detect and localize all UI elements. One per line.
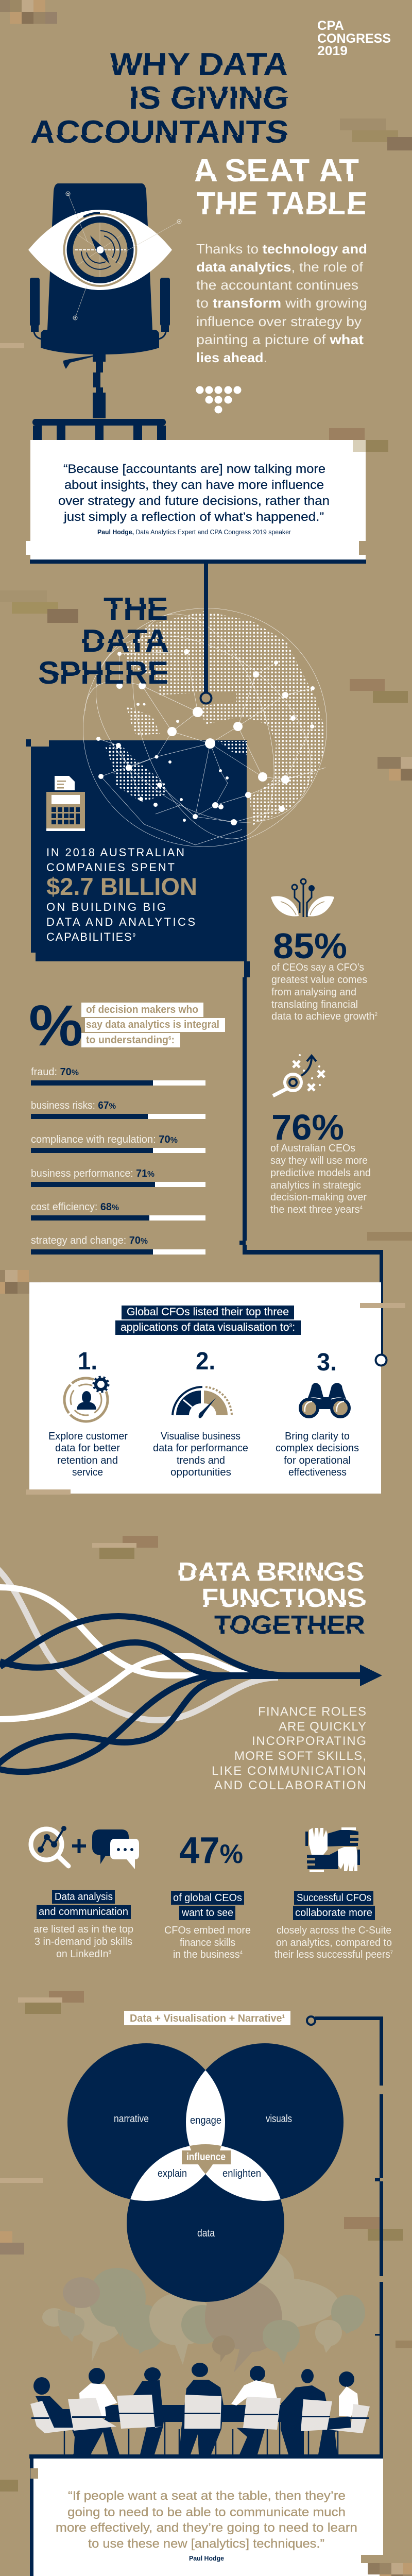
stat: 76% of Australian CEOs: the next three years <box>270 1204 362 1215</box>
callout: decision makers: say data analytics is integral <box>86 1019 219 1030</box>
application 1: data for better <box>55 1443 120 1454</box>
stat: 76% of Australian CEOs: analytics in strategic <box>270 1180 361 1191</box>
title: THE TABLE <box>197 186 368 222</box>
application 3: effectiveness <box>288 1467 347 1478</box>
chart: venn diagram: engage <box>190 2115 221 2126</box>
title: A SEAT AT <box>193 153 359 189</box>
panel: seat at the table quote <box>29 2454 412 2576</box>
application 1: 1. <box>78 1348 97 1375</box>
title: ACCOUNTANTS <box>32 114 289 150</box>
text: finance roles: INCORPORATING <box>252 1734 366 1748</box>
text block: data analysis and communication: Data analysis <box>55 1891 113 1903</box>
quote attribution: Paul Hodge <box>189 2554 224 2562</box>
stat: 76% of Australian CEOs: 76% <box>271 1107 344 1147</box>
application 3: Bring clarity to <box>285 1431 350 1442</box>
text block: data analysis and communication: 3 in-demand job skills <box>35 1936 132 1947</box>
application 1: service <box>72 1467 103 1478</box>
text block: data analysis and communication: are listed as in the top <box>33 1924 133 1935</box>
stat: 76% of Australian CEOs: 4 <box>360 1205 363 1211</box>
section heading: data brings functions together <box>178 1557 365 1639</box>
quote text: about insights, they can have more influence <box>64 478 324 492</box>
stat: 85% of CEOs: translating financial <box>271 999 358 1010</box>
text block: data analysis and communication: 8 <box>109 1950 111 1955</box>
bar chart: data analytics integral to understanding: cost efficiency: 68% <box>31 1201 119 1213</box>
icon: calculator and paper <box>46 776 85 831</box>
intro text: data analytics , the role of <box>196 259 364 275</box>
text block: global CEOs: CFOs embed more <box>164 1925 251 1936</box>
quote text: over strategy and future decisions, rather than <box>58 494 330 508</box>
text block: global CEOs: in the business <box>173 1949 242 1960</box>
panel: Paul Hodge quote <box>26 440 366 564</box>
intro text: to transform with growing <box>196 295 367 311</box>
text: finance roles: LIKE COMMUNICATION <box>212 1764 366 1778</box>
chart: venn diagram: enlighten <box>222 2168 261 2179</box>
stat: 85% of CEOs: of CEOs say a CFO’s <box>271 962 364 973</box>
quote text <box>56 2489 357 2551</box>
quote text: “Because [accountants are] now talking more <box>63 462 325 476</box>
connector line with ring <box>201 564 211 704</box>
intro text: the accountant continues <box>196 277 358 293</box>
logo: CPA Congress 2019: 2019 <box>317 44 348 58</box>
text block: data analysis and communication: on LinkedIn <box>56 1948 109 1960</box>
text block: successful CFOs: collaborate more <box>295 1907 372 1919</box>
text: finance roles: MORE SOFT SKILLS, <box>234 1749 366 1763</box>
application 2 <box>153 1348 248 1478</box>
logo: CPA Congress 2019 <box>317 19 391 58</box>
panel: $2.7 billion navy background <box>31 740 250 977</box>
bar chart: data analytics integral to understanding: business risks: 67% <box>31 1100 116 1111</box>
intro text: painting a picture of what <box>196 332 364 347</box>
stat: $2.7 billion: IN 2018 AUSTRALIAN <box>46 846 184 859</box>
callout: decision makers: of decision makers who <box>86 1004 198 1015</box>
quote text: to use these new [analytics] techniques.” <box>88 2537 324 2551</box>
text block: successful CFOs: 7 <box>390 1950 393 1956</box>
icon: analysis plus communication <box>31 1826 139 1869</box>
icon: converging lines into arrow <box>0 1569 382 1772</box>
stat: 76% of Australian CEOs: predictive models and <box>270 1167 371 1179</box>
application 3 <box>276 1349 359 1478</box>
application 1: retention and <box>57 1455 118 1466</box>
icon: office chair with eye <box>28 183 181 440</box>
stat: 47%: 47% <box>179 1830 243 1871</box>
section heading: data brings functions together: TOGETHER <box>214 1610 365 1639</box>
chart: venn diagram: influence <box>186 2151 226 2163</box>
chart: venn diagram: visuals <box>266 2113 292 2125</box>
quote attribution: Paul Hodge, Data Analytics Expert and CPA Congress 2019 speaker <box>97 528 291 536</box>
text: finance roles: FINANCE ROLES <box>258 1705 366 1719</box>
section heading: the data sphere <box>38 591 169 691</box>
intro text: influence over strategy by <box>196 314 362 329</box>
application 1: Explore customer <box>48 1431 128 1442</box>
panel heading <box>115 1306 301 1335</box>
icon: leaves and circuit <box>271 879 334 917</box>
callout: decision makers: : <box>171 1035 175 1046</box>
stat: 85% of CEOs: 85% <box>273 926 347 966</box>
stat: 85% of CEOs: from analysing and <box>271 987 356 998</box>
panel: top three applications <box>26 1282 405 1495</box>
stat: $2.7 billion: DATA AND ANALYTICS <box>46 916 195 928</box>
icon: magnifier with plays <box>273 1054 324 1096</box>
text block: global CEOs: of global CEOs <box>173 1892 242 1904</box>
panel heading: : <box>292 1321 295 1333</box>
application 2: opportunities <box>170 1467 231 1478</box>
stat: $2.7 billion: COMPANIES SPENT <box>46 861 175 874</box>
connector line around venn and table <box>307 2016 383 2454</box>
quote text: more effectively, and they’re going to need to learn <box>56 2521 357 2535</box>
stat: $2.7 billion: 9 <box>132 933 135 938</box>
logo: CPA Congress 2019: CONGRESS <box>317 31 391 46</box>
text block: global CEOs <box>164 1891 251 1960</box>
section heading: the data sphere: THE <box>104 591 168 627</box>
label: data + visualisation + narrative: Data + Visualisation + Narrative <box>130 2013 284 2024</box>
quote text: “If people want a seat at the table, then they’re <box>68 2489 346 2503</box>
text block: global CEOs: want to see <box>181 1907 233 1919</box>
text: finance roles: AND COLLABORATION <box>214 1778 366 1792</box>
title <box>32 47 368 222</box>
application 2: 2. <box>196 1348 215 1375</box>
callout: decision makers: to understanding <box>86 1035 170 1046</box>
chart: venn diagram: explain <box>158 2168 187 2179</box>
quote text: just simply a reflection of what’s happened.” <box>63 510 324 524</box>
icon: people seated at table <box>30 2363 370 2454</box>
text block: successful CFOs <box>274 1891 393 1960</box>
bar chart: data analytics integral to understanding: business performance: 71% <box>31 1168 154 1179</box>
chart: venn diagram: data <box>197 2228 215 2239</box>
text: finance roles <box>212 1705 366 1792</box>
stat: $2.7 billion: ON BUILDING BIG <box>46 901 166 913</box>
stat: $2.7 billion: CAPABILITIES <box>46 930 132 943</box>
section heading: data brings functions together: FUNCTIONS <box>201 1583 365 1613</box>
title: IS GIVING <box>129 80 288 116</box>
panel heading: applications of data visualisation to <box>121 1321 288 1333</box>
stat: 76% of Australian CEOs <box>270 1107 371 1215</box>
stat: 85% of CEOs <box>271 926 377 1022</box>
icon: funnel of dots <box>196 386 241 413</box>
icon: large percent sign: % <box>29 993 83 1058</box>
table <box>105 2405 281 2422</box>
intro text <box>196 241 367 365</box>
bar chart: data analytics integral to understanding: compliance with regulation: 70% <box>31 1134 178 1145</box>
chart: venn diagram <box>67 2043 344 2302</box>
application 3: 3. <box>317 1349 337 1376</box>
chart: data sphere globe <box>56 581 354 874</box>
callout: decision makers: 6 <box>168 1036 171 1041</box>
icon: four linked hands <box>305 1827 360 1872</box>
speech bubbles <box>42 2246 365 2372</box>
connector line to white panel <box>239 977 383 1354</box>
stat: 85% of CEOs: 2 <box>374 1012 377 1018</box>
section heading: the data sphere: DATA <box>82 623 169 659</box>
section heading: the data sphere: SPHERE <box>38 655 168 691</box>
text block: successful CFOs: their less successful peers <box>274 1949 396 1960</box>
text block: data analysis and communication: and communication <box>39 1906 128 1918</box>
stat: 76% of Australian CEOs: say they will use more <box>270 1155 368 1166</box>
application 1 <box>48 1348 128 1478</box>
stat: $2.7 billion: $2.7 BILLION <box>46 873 197 900</box>
quote text: going to need to be able to communicate much <box>67 2505 346 2519</box>
quote text <box>58 462 330 524</box>
eye <box>28 210 172 290</box>
bar chart: data analytics integral to understanding: fraud: 70% <box>31 1066 79 1078</box>
panel heading: 3 <box>289 1323 293 1329</box>
text block: global CEOs: 4 <box>240 1950 243 1956</box>
stat: 85% of CEOs: greatest value comes <box>271 974 367 986</box>
logo: CPA Congress 2019: CPA <box>317 19 344 33</box>
application 2: Visualise business <box>161 1431 241 1442</box>
application 3: complex decisions <box>276 1443 359 1454</box>
stat: $2.7 billion <box>46 846 197 943</box>
text block: data analysis and communication <box>33 1890 133 1960</box>
section heading: data brings functions together: DATA BRINGS <box>178 1557 365 1586</box>
text block: successful CFOs: Successful CFOs <box>297 1892 371 1904</box>
title: WHY DATA <box>110 47 289 82</box>
application 2: trends and <box>177 1455 225 1466</box>
callout: decision makers <box>81 1003 225 1047</box>
stat: 85% of CEOs: data to achieve growth <box>271 1011 375 1022</box>
label: data + visualisation + narrative: 1 <box>282 2014 285 2020</box>
stat: 76% of Australian CEOs: of Australian CEOs <box>270 1143 355 1154</box>
text block: global CEOs: finance skills <box>180 1937 235 1948</box>
text block: successful CFOs: on analytics, compared to <box>276 1937 392 1948</box>
bar chart: data analytics integral to understanding <box>31 1066 205 1255</box>
application 3: for operational <box>284 1455 351 1466</box>
intro text: Thanks to technology and <box>196 241 367 257</box>
text block: successful CFOs: closely across the C-Suite <box>277 1925 391 1936</box>
text: finance roles: ARE QUICKLY <box>279 1720 366 1734</box>
stat: 76% of Australian CEOs: decision-making over <box>270 1192 367 1203</box>
panel heading: Global CFOs listed their top three <box>127 1306 289 1318</box>
application 2: data for performance <box>153 1443 248 1454</box>
chart: venn diagram: narrative <box>114 2113 149 2125</box>
intro text: lies ahead. <box>196 350 267 365</box>
bar chart: data analytics integral to understanding: strategy and change: 70% <box>31 1235 148 1246</box>
